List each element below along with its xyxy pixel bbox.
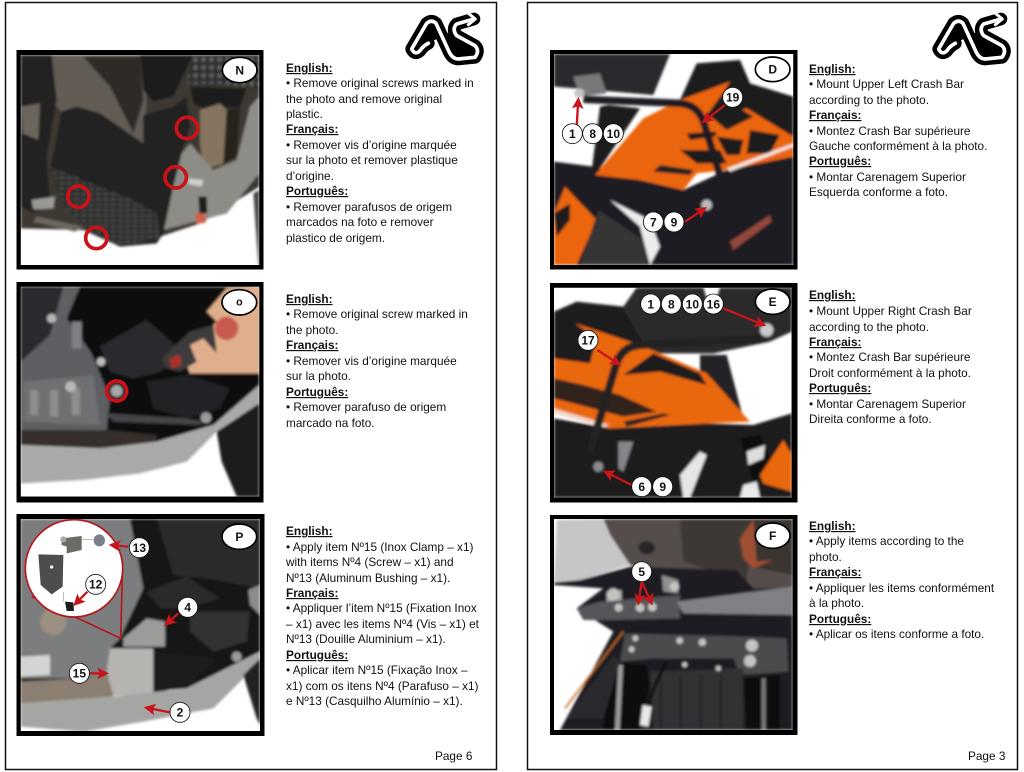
number labels: 8 xyxy=(589,127,596,141)
number labels: 8 xyxy=(668,297,675,311)
text D xyxy=(809,62,987,199)
number labels: 1 xyxy=(569,127,576,141)
text P: • Aplicar item Nº15 (Fixação Inox – xyxy=(286,663,468,677)
text N: • Remove original screws marked in xyxy=(286,76,474,90)
text O: Português: xyxy=(286,385,348,399)
text N: the photo and remove original xyxy=(286,92,442,106)
text O: Français: xyxy=(286,338,338,352)
page frame left xyxy=(6,2,496,770)
text P: with items Nº4 (Screw – x1) and xyxy=(285,555,454,569)
label N: N xyxy=(235,63,244,77)
text D: • Montar Carenagem Superior xyxy=(809,170,966,184)
text E: Direita conforme a foto. xyxy=(809,412,932,426)
number labels: 10 xyxy=(607,127,620,141)
text E: • Mount Upper Right Crash Bar xyxy=(809,304,972,318)
number labels: 6 xyxy=(638,480,645,494)
screw markers xyxy=(68,117,198,249)
number labels: 12 xyxy=(89,578,103,592)
label O xyxy=(222,290,257,315)
page frame right xyxy=(528,2,1018,770)
text P: Português: xyxy=(286,648,348,662)
text F: • Apply items according to the xyxy=(809,534,964,548)
label N xyxy=(222,57,257,83)
number labels: 9 xyxy=(659,480,666,494)
label D xyxy=(755,57,790,82)
photo P: apply items xyxy=(16,514,264,736)
arrows xyxy=(75,545,178,712)
number labels: 13 xyxy=(133,541,146,555)
number labels: 19 xyxy=(726,91,740,105)
label F xyxy=(755,523,790,548)
number labels xyxy=(578,294,723,497)
text P: e Nº13 (Casquilho Alumínio – x1). xyxy=(286,694,463,708)
text O: • Remover vis d’origine marquée xyxy=(286,354,457,368)
text O: • Remove original screw marked in xyxy=(286,307,468,321)
text N: d’origine. xyxy=(286,169,334,183)
label D: D xyxy=(768,63,777,77)
arrows xyxy=(638,582,652,603)
panel: page 3 xyxy=(528,2,1018,770)
text F: photo. xyxy=(809,550,842,564)
label P xyxy=(222,524,257,549)
number labels xyxy=(69,538,198,722)
arrows xyxy=(597,308,764,485)
photo F: apply items xyxy=(550,515,798,735)
text N: • Remover vis d’origine marquée xyxy=(286,138,457,152)
text F: Français: xyxy=(809,565,861,579)
photo E: upper right crash bar xyxy=(550,283,798,502)
screw marker xyxy=(107,381,127,401)
text E xyxy=(809,288,972,426)
text P: x1) com os itens Nº4 (Parafuso – x1) xyxy=(286,679,479,693)
text O xyxy=(286,292,468,430)
text P: Nº13 (Douille Aluminium – x1). xyxy=(286,632,446,646)
number labels: 10 xyxy=(686,297,699,311)
text E: • Montar Carenagem Superior xyxy=(809,397,966,411)
text O: sur la photo. xyxy=(286,369,351,383)
text E: • Montez Crash Bar supérieure xyxy=(809,350,971,364)
photo N: remove screws xyxy=(16,50,264,270)
text O: • Remover parafuso de origem xyxy=(286,400,446,414)
number labels: 7 xyxy=(650,215,657,229)
text F xyxy=(809,519,995,641)
text F: • Appliquer les items conformément xyxy=(809,581,995,595)
text D: • Mount Upper Left Crash Bar xyxy=(809,77,964,91)
text N: • Remover parafusos de origem xyxy=(286,200,452,214)
text N: marcados na foto e remover xyxy=(286,215,434,229)
number labels: 17 xyxy=(581,334,595,348)
number labels: 4 xyxy=(184,601,191,615)
text D: English: xyxy=(809,62,856,76)
number labels: 9 xyxy=(671,215,678,229)
page number 3: Page 3 xyxy=(968,749,1006,763)
text E: according to the photo. xyxy=(809,320,929,334)
number labels: 1 xyxy=(647,297,654,311)
number labels: 2 xyxy=(177,706,184,720)
logo: AS right xyxy=(939,13,1004,59)
photo D: upper left crash bar xyxy=(550,50,798,270)
text F: English: xyxy=(809,519,856,533)
page number 6: Page 6 xyxy=(435,749,473,763)
label E xyxy=(755,289,790,314)
text O: the photo. xyxy=(286,323,338,337)
text P: English: xyxy=(286,524,333,538)
text E: Português: xyxy=(809,381,871,395)
label E: E xyxy=(769,295,777,309)
text F: à la photo. xyxy=(809,596,864,610)
text D: Français: xyxy=(809,108,861,122)
arrows xyxy=(577,99,725,222)
text D: according to the photo. xyxy=(809,93,929,107)
text D: Gauche conformément à la photo. xyxy=(809,139,987,153)
magnifier inset xyxy=(25,520,123,638)
text E: English: xyxy=(809,288,856,302)
number label 5 xyxy=(632,562,652,582)
text O: English: xyxy=(286,292,333,306)
number labels: 16 xyxy=(707,297,720,311)
text D: • Montez Crash Bar supérieure xyxy=(809,124,971,138)
text P: – x1) avec les items Nº4 (Vis – x1) et xyxy=(286,617,480,631)
text N: Français: xyxy=(286,122,338,136)
text O: marcado na foto. xyxy=(286,416,375,430)
text N: sur la photo et remover plastique xyxy=(286,153,458,167)
label P: P xyxy=(235,530,243,544)
text N: plastico de origem. xyxy=(286,231,385,245)
text P: • Appliquer l’item Nº15 (Fixation Inox xyxy=(286,601,477,615)
text N: English: xyxy=(286,61,333,75)
text E: Droit conformément à la photo. xyxy=(809,366,971,380)
text P xyxy=(285,524,480,708)
number label 5: 5 xyxy=(638,565,645,579)
text P: • Apply item Nº15 (Inox Clamp – x1) xyxy=(286,540,474,554)
text D: Português: xyxy=(809,154,871,168)
text D: Esquerda conforme a foto. xyxy=(809,185,948,199)
number labels xyxy=(562,87,743,232)
number labels: 15 xyxy=(73,667,86,681)
text F: • Aplicar os itens conforme a foto. xyxy=(809,627,984,641)
label F: F xyxy=(769,529,776,543)
text F: Português: xyxy=(809,612,871,626)
logo: AS left xyxy=(412,13,477,59)
text E: Français: xyxy=(809,335,861,349)
text N: Português: xyxy=(286,184,348,198)
text P: Français: xyxy=(286,586,338,600)
panel: page 6 xyxy=(6,2,496,770)
text P: Nº13 (Aluminum Bushing – x1). xyxy=(286,571,450,585)
text N xyxy=(286,61,474,245)
text N: plastic. xyxy=(286,107,323,121)
photo O: remove screw xyxy=(16,282,264,502)
label O: o xyxy=(236,297,243,309)
